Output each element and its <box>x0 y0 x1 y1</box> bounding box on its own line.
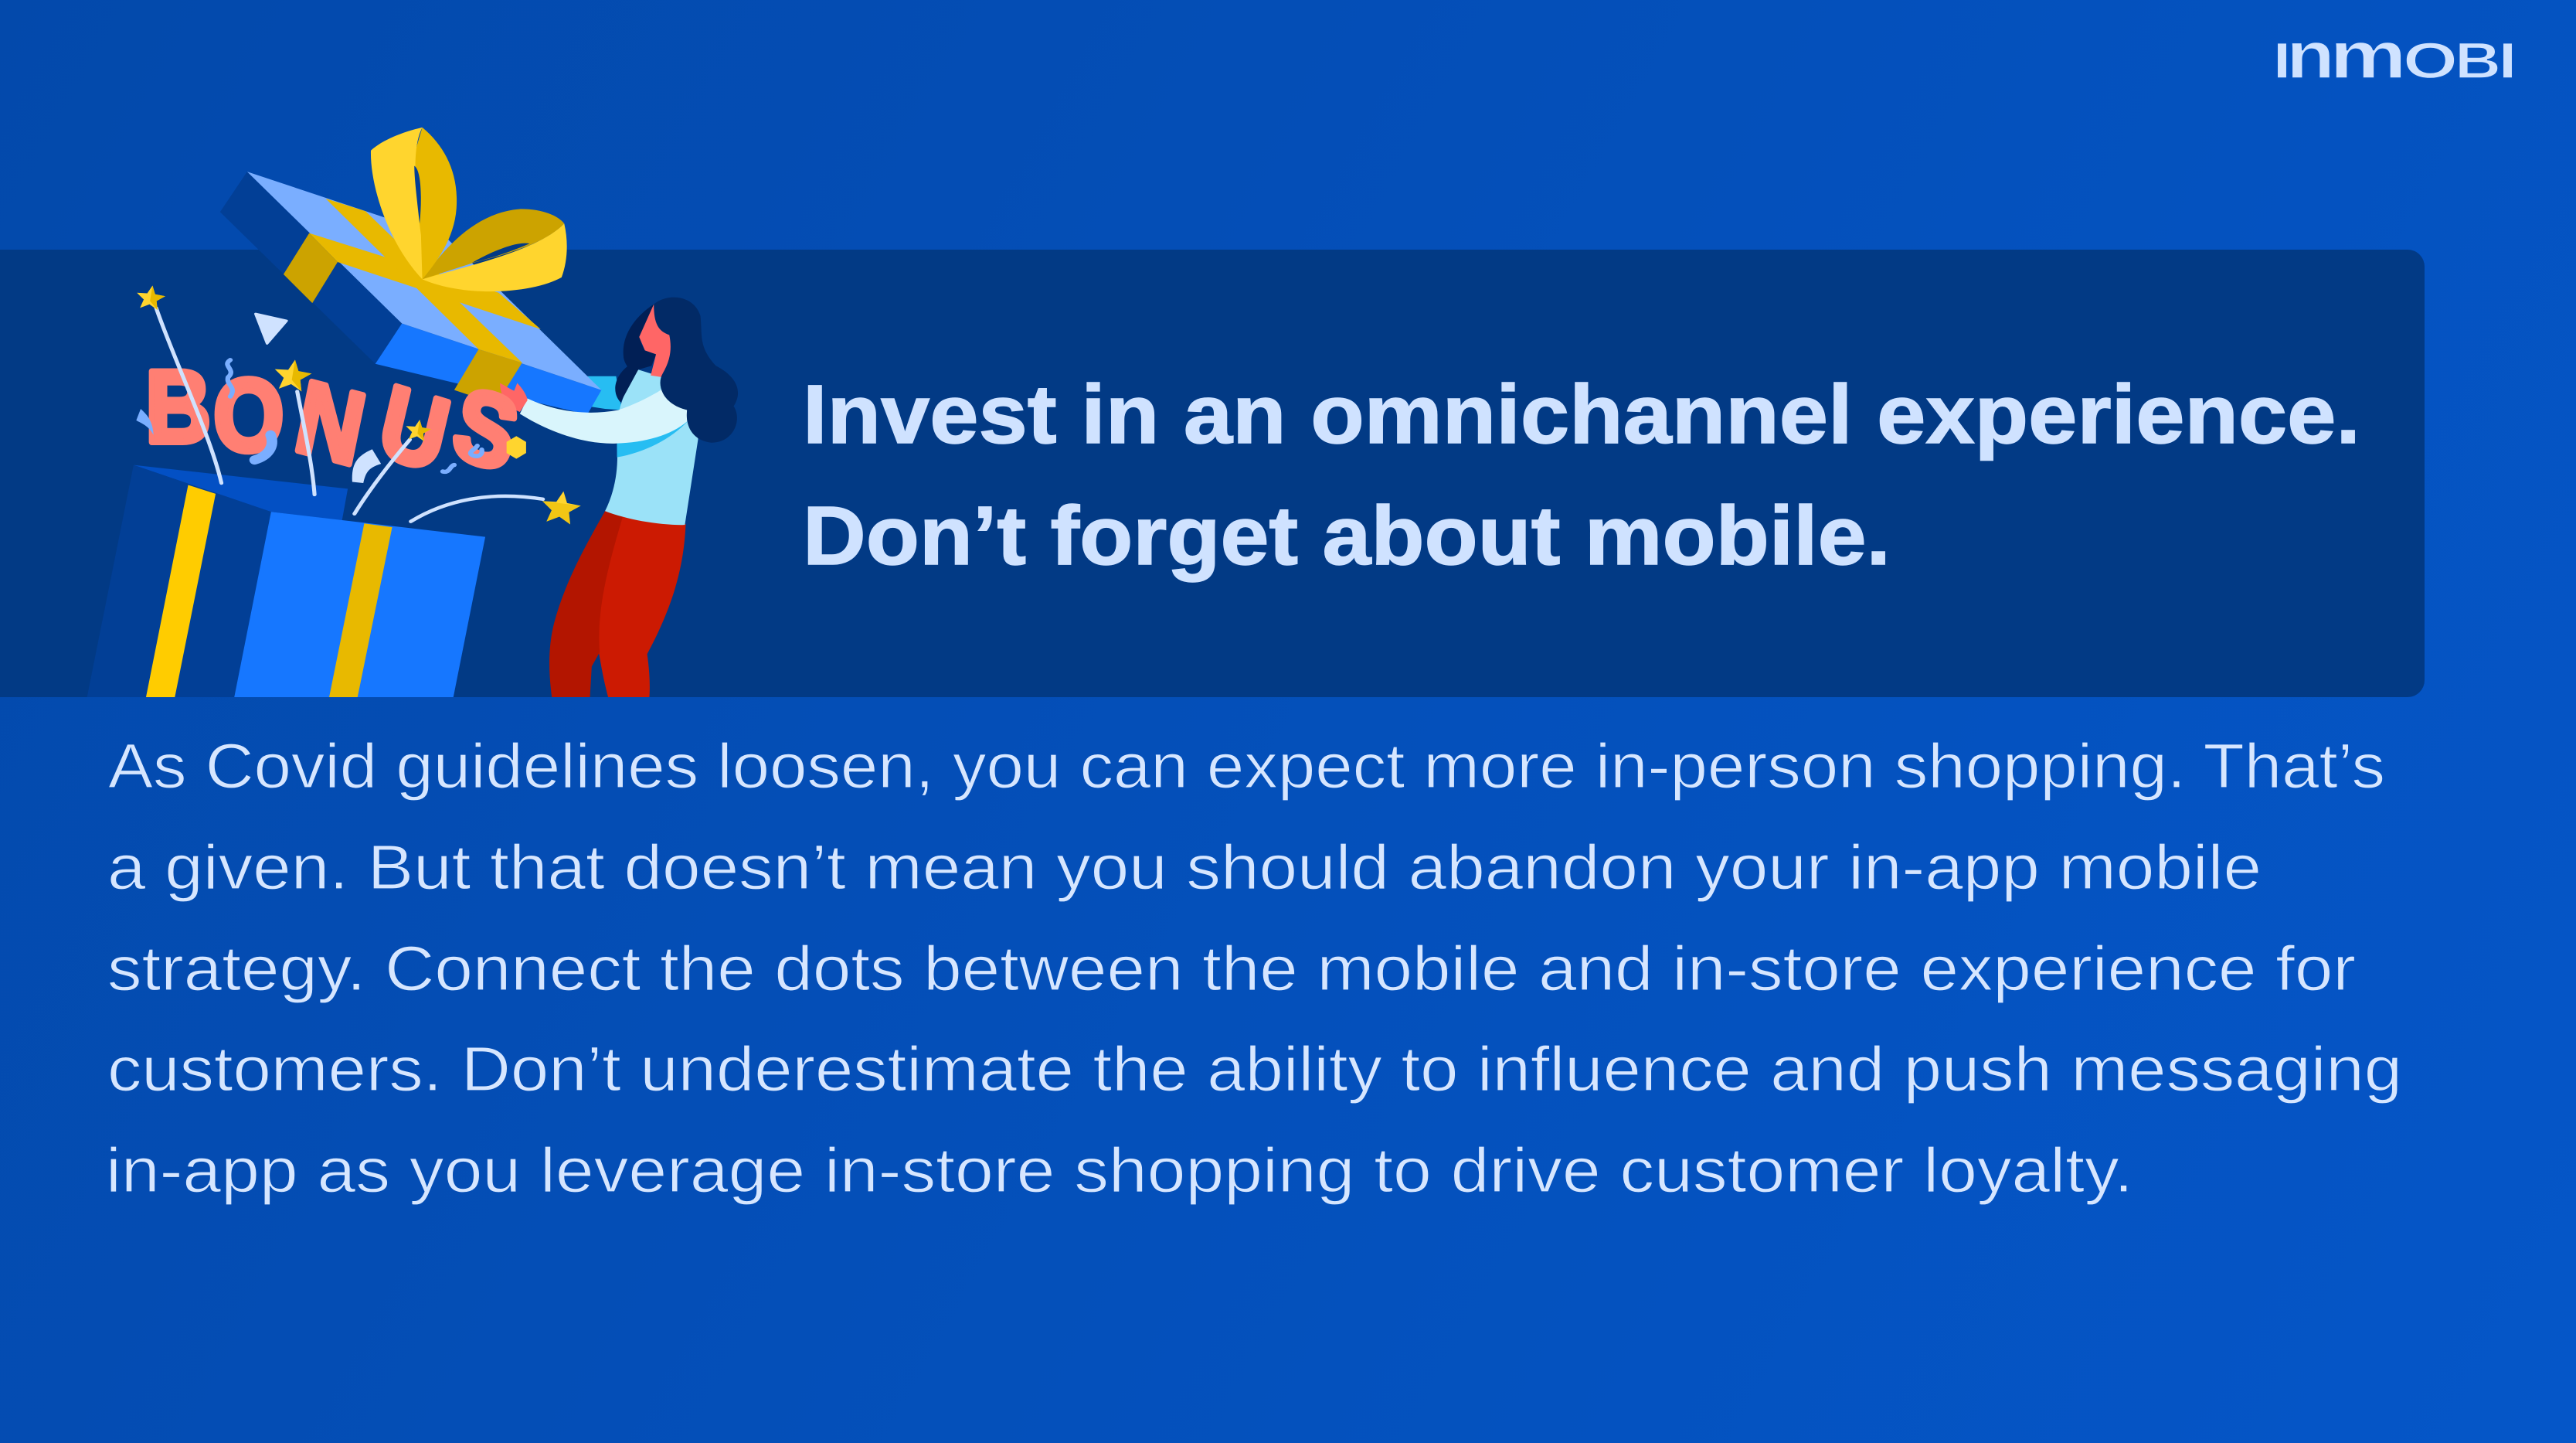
star 2 <box>272 358 314 393</box>
BONUS lettering: BONUS <box>145 349 528 494</box>
body line 1: As Covid guidelines loosen, you can expect more in-person shopping. That’s <box>108 731 2385 801</box>
body line 2: a given. But that doesn’t mean you should abandon your in-app mobile <box>107 832 2262 903</box>
confetti, stars and sparkle lines <box>134 284 583 526</box>
arm shadow <box>617 420 688 458</box>
heading line 2: Don’t forget about mobile. <box>803 488 1891 582</box>
hand <box>500 383 528 412</box>
lid ribbon <box>284 199 541 404</box>
body line 5: in-app as you leverage in-store shopping to drive customer loyalty. <box>106 1135 2133 1206</box>
gift box lid with ribbon and bow <box>220 128 601 414</box>
torso <box>605 369 698 525</box>
back hair <box>615 305 656 403</box>
trousers <box>549 511 686 697</box>
body line 3: strategy. Connect the dots between the mobile and in-store experience for <box>107 934 2356 1004</box>
open gift box <box>87 465 485 697</box>
lid top face <box>247 172 601 390</box>
woman's far arm <box>586 376 622 410</box>
illustration: woman opening bonus gift box <box>87 128 738 697</box>
panel: heading band <box>0 250 2425 697</box>
logo: InMobi wordmark: I <box>2272 32 2292 89</box>
heading line 1: Invest in an omnichannel experience. <box>803 367 2360 461</box>
logo: InMobi wordmark: I <box>2498 32 2517 89</box>
star 1 <box>134 284 167 311</box>
logo: InMobi wordmark: B <box>2455 32 2501 89</box>
logo: InMobi wordmark: m <box>2330 19 2407 93</box>
lid side faces <box>220 172 601 414</box>
logo: InMobi wordmark: O <box>2403 32 2458 89</box>
star 3 <box>404 418 432 442</box>
body text <box>106 731 2402 1206</box>
confetti shapes <box>136 314 526 483</box>
heading <box>803 367 2360 582</box>
bow <box>371 128 567 291</box>
front hair <box>654 298 738 443</box>
near arm <box>520 389 687 444</box>
body line 4: customers. Don’t underestimate the ability to influence and push messaging <box>107 1034 2402 1104</box>
woman <box>500 298 738 697</box>
logo: InMobi wordmark: n <box>2286 19 2335 93</box>
face and neck <box>639 305 672 377</box>
sparkle lines <box>156 308 543 522</box>
star 4 <box>539 489 583 526</box>
